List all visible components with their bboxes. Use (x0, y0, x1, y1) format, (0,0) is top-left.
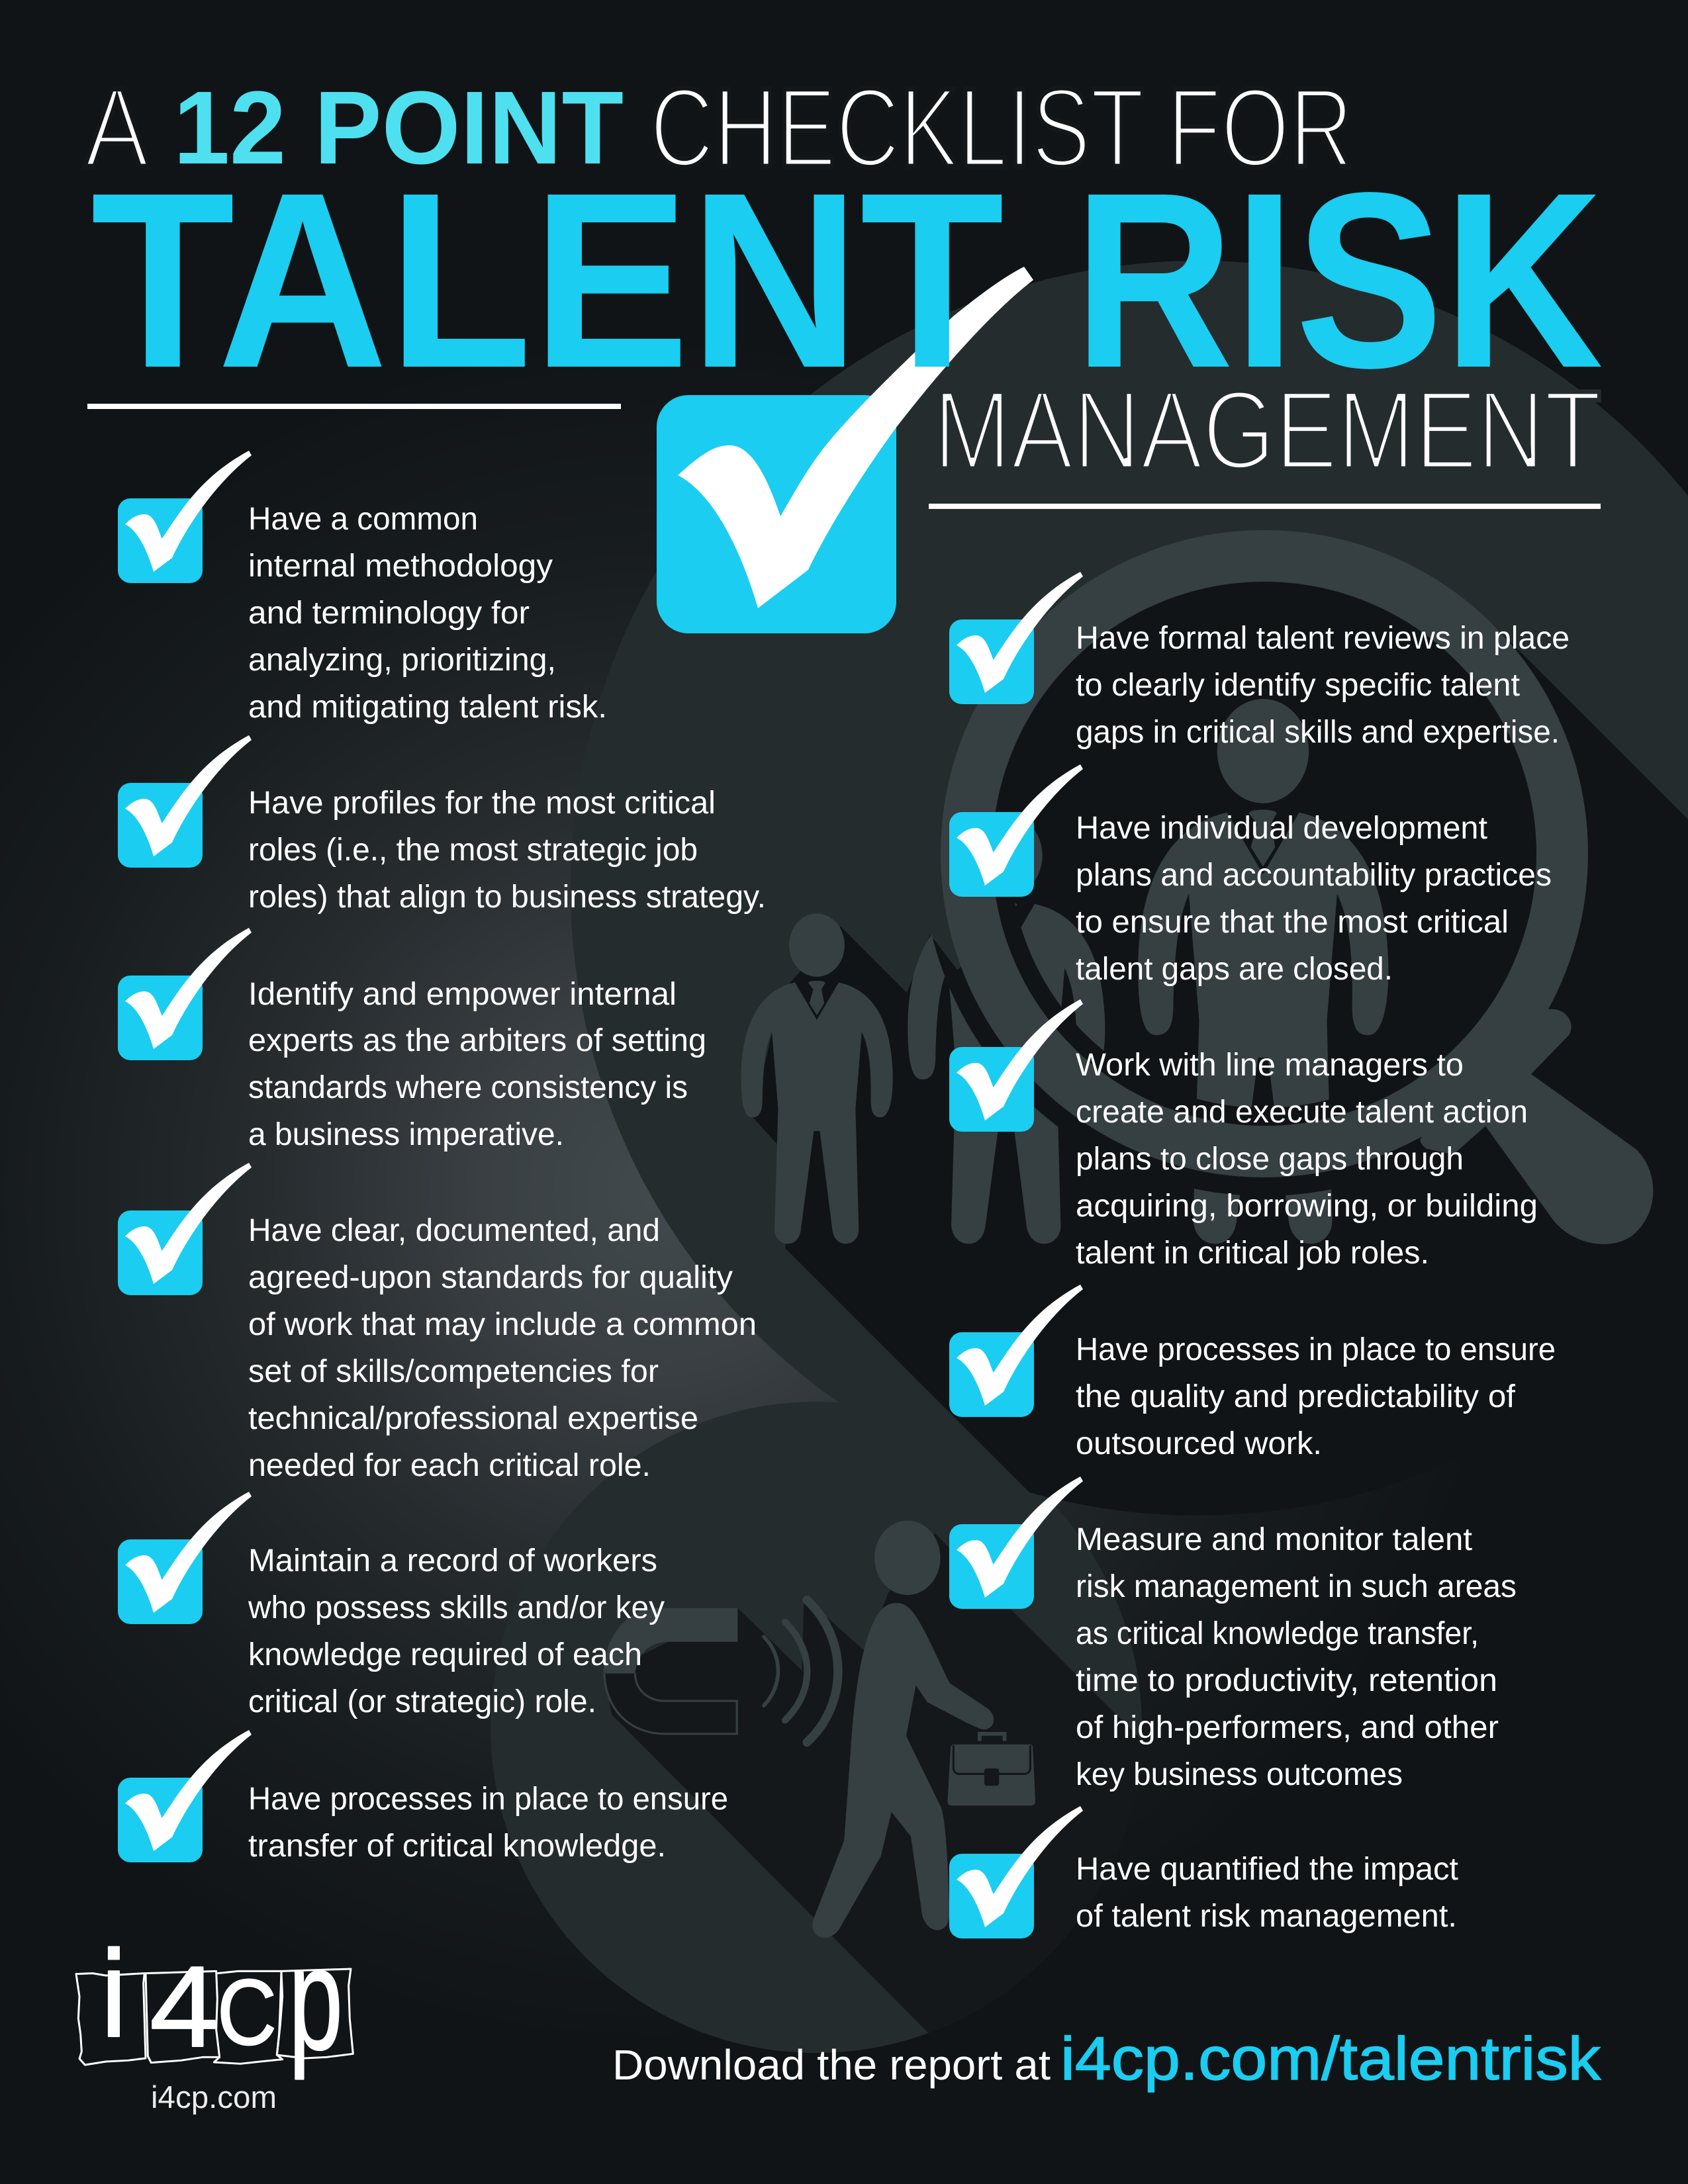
checklist item 5 (118, 1492, 665, 1719)
icon: magnetic waves (764, 1600, 838, 1743)
checklist item 12 (949, 1806, 1458, 1938)
illustration: walking figure with magnet (491, 1402, 1142, 2053)
checklist item 2: Have profiles for the most critical (248, 786, 716, 821)
checklist item 1 (118, 451, 607, 725)
checklist item 5: critical (or strategic) role. (248, 1684, 596, 1719)
checklist item 11 (949, 1477, 1517, 1792)
checklist item 9 (949, 999, 1538, 1271)
checklist item 6 (118, 1730, 728, 1864)
checklist item 7: Have formal talent reviews in place (1076, 621, 1570, 656)
checklist item 9: plans to close gaps through (1076, 1142, 1464, 1177)
checklist item 10: Have processes in place to ensure (1076, 1332, 1556, 1367)
checklist item 1: Have a common (248, 502, 478, 537)
title line: a 12 point checklist for: CHECKLIST FOR (650, 65, 1353, 190)
checklist item 8: plans and accountability practices (1076, 858, 1552, 893)
logo: i4cp: i (103, 1925, 125, 2063)
magnifying glass handle (1421, 1009, 1653, 1244)
checklist item 7: to clearly identify specific talent (1076, 668, 1520, 703)
checklist item 9: talent in critical job roles. (1076, 1236, 1429, 1271)
checklist item 11: Measure and monitor talent (1076, 1522, 1472, 1557)
long shadow (753, 625, 1688, 1588)
magnifying glass ring (966, 556, 1562, 1152)
checklist item 11: of high-performers, and other (1076, 1710, 1499, 1745)
icon: briefcase (947, 1734, 1035, 1805)
checklist item 4: agreed-upon standards for quality (248, 1260, 733, 1295)
checklist item 2 (118, 735, 766, 915)
checklist item 6: Have processes in place to ensure (248, 1782, 728, 1817)
checklist item 2: roles) that align to business strategy. (248, 880, 766, 915)
checklist item 4: of work that may include a common (248, 1307, 757, 1342)
logo: i4cp: i4cp.com (151, 2079, 277, 2115)
divider left (87, 404, 621, 409)
checklist item 7: gaps in critical skills and expertise. (1076, 715, 1560, 750)
checklist item 1: and mitigating talent risk. (248, 690, 607, 725)
icon: magnet (604, 1608, 737, 1734)
checklist item 1: and terminology for (248, 596, 530, 631)
title line: a 12 point checklist for: 12 POINT (173, 70, 624, 186)
checklist item 4: Have clear, documented, and (248, 1213, 660, 1248)
checklist item 3: standards where consistency is (248, 1070, 688, 1105)
title line: a 12 point checklist for (85, 65, 1353, 190)
people behind lens (908, 699, 1388, 1244)
checklist item 8 (949, 764, 1552, 987)
large checkbox icon (657, 267, 1033, 633)
checklist item 10: outsourced work. (1076, 1426, 1322, 1461)
checklist item 1: internal methodology (248, 549, 553, 584)
divider right (929, 504, 1601, 509)
checklist item 7 (949, 572, 1570, 750)
checklist item 2: roles (i.e., the most strategic job (248, 833, 698, 868)
title: talent risk: TALENT (91, 141, 1004, 420)
checklist item 3: Identify and empower internal (248, 977, 677, 1012)
checklist item 10 (949, 1285, 1556, 1461)
checklist item 11: as critical knowledge transfer, (1076, 1616, 1479, 1651)
checklist item 10: the quality and predictability of (1076, 1379, 1516, 1414)
person: left (741, 913, 893, 1244)
logo: i4cp: p (289, 1917, 343, 2080)
checklist item 6: transfer of critical knowledge. (248, 1829, 666, 1864)
icon: walking person (812, 1521, 994, 1938)
illustration: magnifying glass and people (571, 261, 1688, 1588)
logo: i4cp: C (217, 1960, 277, 2064)
checklist item 4: technical/professional expertise (248, 1401, 698, 1436)
checklist item 9: acquiring, borrowing, or building (1076, 1189, 1538, 1224)
checklist item 8: to ensure that the most critical (1076, 905, 1509, 940)
checklist item 5: knowledge required of each (248, 1637, 642, 1672)
checklist item 5: who possess skills and/or key (248, 1590, 665, 1625)
title: talent risk (91, 141, 1603, 420)
title: talent risk: RISK (1074, 141, 1603, 420)
checklist item 4: set of skills/competencies for (248, 1354, 659, 1389)
checklist item 3 (118, 928, 706, 1152)
checklist item 11: risk management in such areas (1076, 1569, 1517, 1604)
logo: i4cp: 4 (150, 1942, 218, 2071)
checklist item 3: experts as the arbiters of setting (248, 1023, 706, 1058)
checklist item 1: analyzing, prioritizing, (248, 643, 556, 678)
checklist item 4 (118, 1163, 757, 1483)
checklist item 4: needed for each critical role. (248, 1448, 651, 1483)
footer: download the report: i4cp.com/talentrisk (1060, 2025, 1601, 2093)
lens interior (966, 556, 1562, 1152)
checklist item 12: of talent risk management. (1076, 1899, 1457, 1934)
checklist item 12: Have quantified the impact (1076, 1852, 1458, 1887)
checklist item 8: Have individual development (1076, 811, 1487, 846)
checklist item 11: key business outcomes (1076, 1757, 1403, 1792)
checklist item 5: Maintain a record of workers (248, 1543, 657, 1578)
checklist item 9: Work with line managers to (1076, 1048, 1464, 1083)
footer: download the report: Download the report at (612, 2041, 1051, 2089)
footer: download the report (612, 2025, 1601, 2093)
logo: i4cp (76, 1917, 353, 2115)
checklist item 8: talent gaps are closed. (1076, 952, 1393, 987)
checklist item 3: a business imperative. (248, 1117, 564, 1152)
checklist item 11: time to productivity, retention (1076, 1663, 1497, 1698)
checklist item 9: create and execute talent action (1076, 1095, 1528, 1130)
title line: a 12 point checklist for: A (85, 65, 149, 190)
